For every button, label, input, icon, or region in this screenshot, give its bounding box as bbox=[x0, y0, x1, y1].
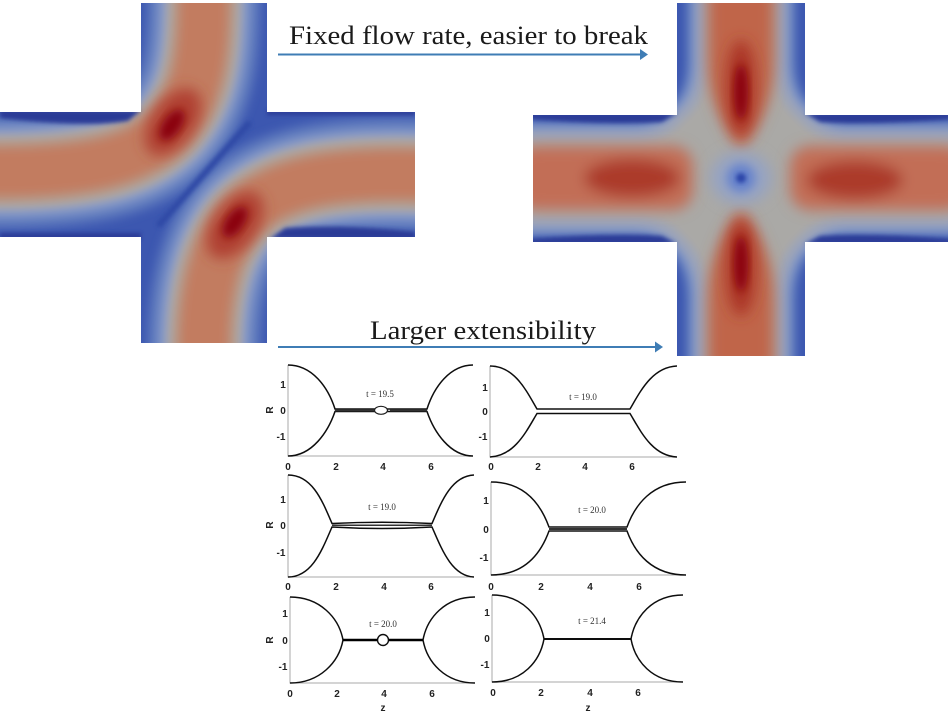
wall shading bbox=[530, 113, 950, 244]
plot: t = 19.0 upper right: -1 bbox=[479, 432, 488, 443]
plot: t = 19.0 middle left bbox=[265, 475, 474, 593]
plots group bbox=[265, 365, 686, 713]
plot: t = 19.5: 6 bbox=[428, 462, 434, 473]
plot: t = 19.0 middle left: 1 bbox=[280, 495, 286, 506]
plot: t = 19.0 middle left: R bbox=[265, 521, 276, 529]
plot: t = 20.0 lower left: 2 bbox=[334, 689, 340, 700]
plot: t = 21.4 lower right: 0 bbox=[490, 688, 496, 699]
plot: t = 19.0 upper right bbox=[479, 366, 677, 473]
plot: t = 19.0 upper right: 0 bbox=[488, 462, 494, 473]
hot spot: lower bbox=[198, 184, 270, 264]
plot: t = 20.0 lower left: 1 bbox=[282, 609, 288, 620]
plot: t = 20.0 middle right: 0 bbox=[488, 582, 494, 593]
plot: t = 20.0 lower left: 6 bbox=[429, 689, 435, 700]
plot: t = 19.0 middle left: 6 bbox=[428, 582, 434, 593]
channel bands bbox=[515, 0, 950, 370]
hot spot: top bbox=[726, 40, 756, 136]
plot: t = 19.0 middle left: 4 bbox=[381, 582, 387, 593]
plot: t = 21.4 lower right: 4 bbox=[587, 688, 593, 699]
plot: t = 19.5: R bbox=[265, 406, 276, 414]
plot: t = 20.0 lower left: R bbox=[265, 636, 276, 644]
plot: t = 19.5: 4 bbox=[380, 462, 386, 473]
plot: t = 19.0 upper right: 2 bbox=[535, 462, 541, 473]
plot: t = 21.4 lower right: 1 bbox=[484, 608, 490, 619]
plot: t = 21.4 lower right: -1 bbox=[481, 660, 490, 671]
plot: t = 21.4 lower right: 6 bbox=[635, 688, 641, 699]
plot: t = 19.5: 1 bbox=[280, 380, 286, 391]
plot: t = 21.4 lower right: 2 bbox=[538, 688, 544, 699]
plot: t = 20.0 lower left bbox=[265, 597, 475, 713]
plot: t = 20.0 middle right: 1 bbox=[483, 496, 489, 507]
plot: t = 20.0 middle right: 4 bbox=[587, 582, 593, 593]
plot: t = 19.0 middle left: 0 bbox=[285, 582, 291, 593]
left cross flow field bbox=[0, 0, 425, 353]
wall shading bbox=[0, 110, 415, 239]
plot: t = 20.0 middle right: 0 bbox=[483, 525, 489, 536]
plot: t = 19.0 middle left: 2 bbox=[333, 582, 339, 593]
plot: t = 19.0 middle left: t = 19.0 bbox=[368, 502, 396, 512]
plot: t = 19.5: t = 19.5 bbox=[366, 389, 394, 399]
plot: t = 20.0 lower left: 0 bbox=[287, 689, 293, 700]
plot: t = 19.5: 0 bbox=[280, 406, 286, 417]
plot: t = 21.4 lower right bbox=[481, 595, 683, 713]
plot: t = 19.0 middle left: 0 bbox=[280, 521, 286, 532]
plot: t = 21.4 lower right: t = 21.4 bbox=[578, 616, 606, 626]
label: larger extensibility: Larger extensibility bbox=[370, 316, 596, 345]
centre stagnation point bbox=[711, 152, 771, 204]
arrow: larger extensibility bbox=[278, 342, 663, 352]
plot: t = 20.0 middle right bbox=[480, 482, 686, 593]
plot: t = 20.0 middle right: 6 bbox=[636, 582, 642, 593]
plot: t = 20.0 middle right: 2 bbox=[538, 582, 544, 593]
plot: t = 19.5 bbox=[265, 365, 473, 473]
arrow: fixed flow rate bbox=[278, 49, 648, 60]
plot: t = 19.5: 0 bbox=[285, 462, 291, 473]
plot: t = 19.0 upper right: 6 bbox=[629, 462, 635, 473]
plot: t = 19.0 upper right: 1 bbox=[482, 383, 488, 394]
plot: t = 19.5: -1 bbox=[277, 432, 286, 443]
plot: t = 20.0 lower left: t = 20.0 bbox=[369, 619, 397, 629]
hot spot: upper bbox=[138, 82, 210, 163]
plot: t = 21.4 lower right: 0 bbox=[484, 634, 490, 645]
label: fixed flow rate: Fixed flow rate, easier to break bbox=[289, 21, 648, 50]
plot: t = 19.0 upper right: 4 bbox=[582, 462, 588, 473]
plot: t = 20.0 middle right: -1 bbox=[480, 553, 489, 564]
plot: t = 20.0 lower left: 0 bbox=[282, 636, 288, 647]
plot: t = 19.0 upper right: t = 19.0 bbox=[569, 392, 597, 402]
plot: t = 20.0 lower left: 4 bbox=[381, 689, 387, 700]
plot: t = 20.0 middle right: t = 20.0 bbox=[578, 505, 606, 515]
plot: t = 19.0 upper right: 0 bbox=[482, 407, 488, 418]
hot spot: bottom bbox=[726, 220, 756, 316]
plot: t = 19.5: 2 bbox=[333, 462, 339, 473]
right cross flow field bbox=[515, 0, 950, 370]
plot: t = 20.0 lower left: -1 bbox=[279, 662, 288, 673]
plot: t = 19.0 middle left: -1 bbox=[277, 548, 286, 559]
